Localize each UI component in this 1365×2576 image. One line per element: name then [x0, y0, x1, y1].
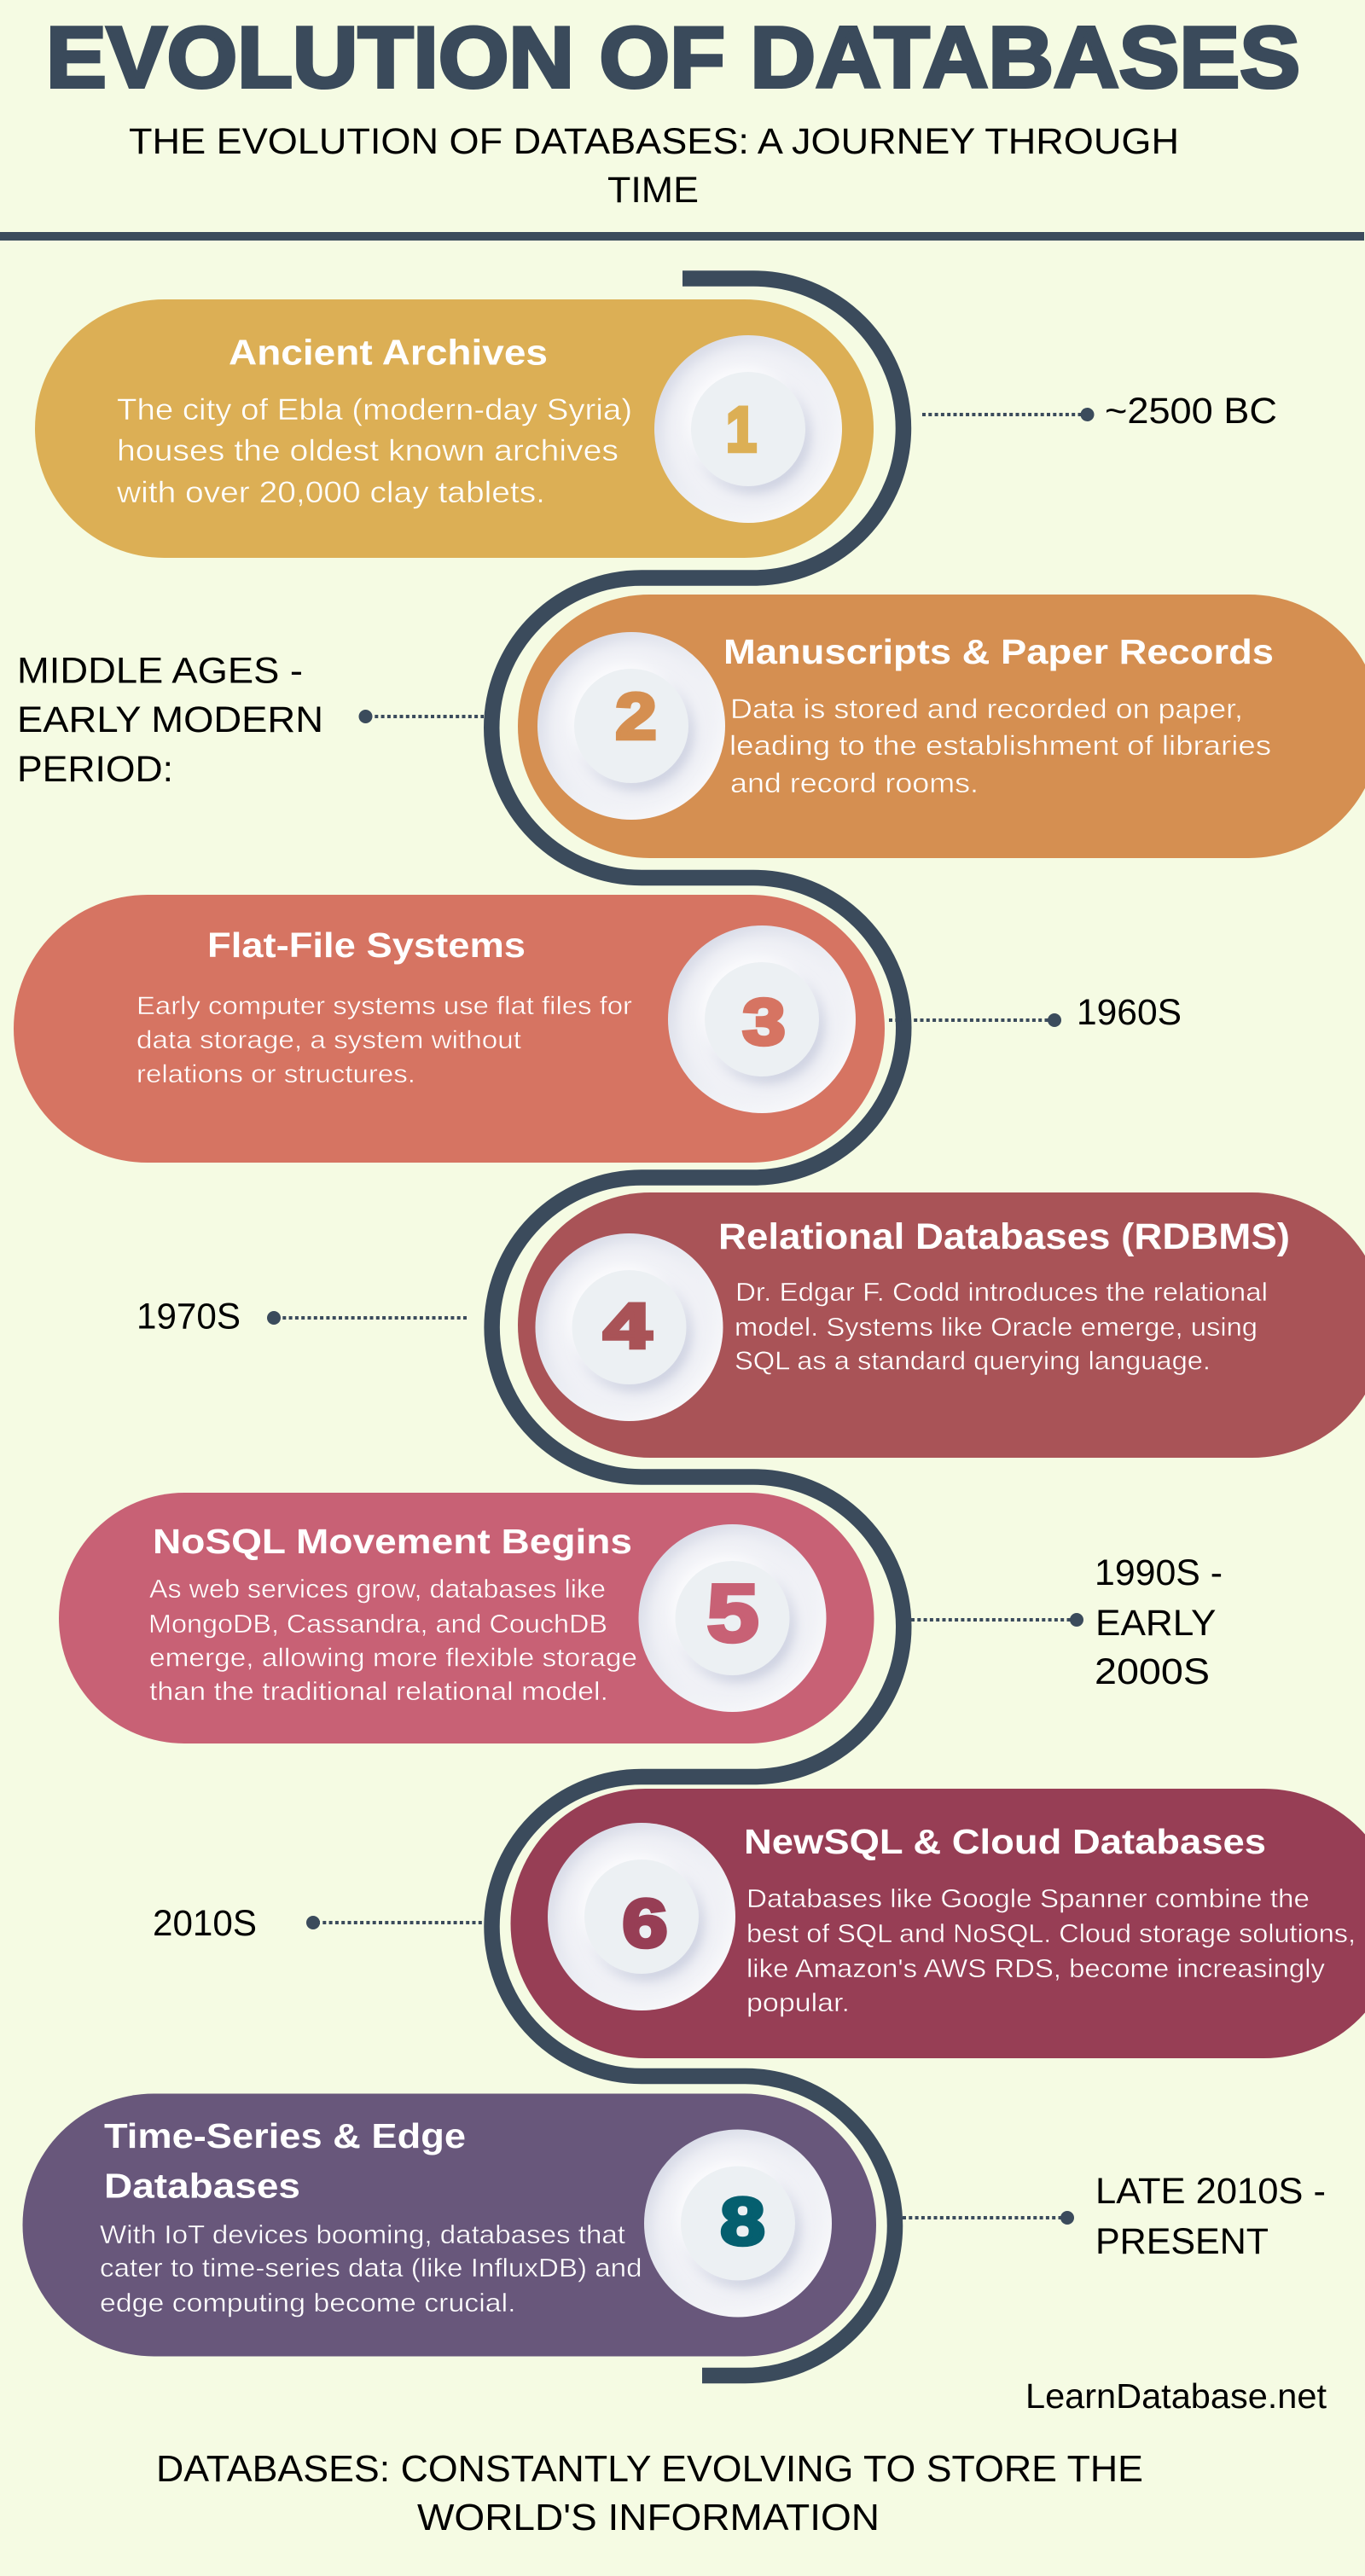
body text: houses the oldest known archives	[117, 434, 619, 467]
body text: MongoDB, Cassandra, and CouchDB	[148, 1609, 607, 1639]
panel: 3 Flat-File Systems	[14, 895, 885, 1163]
date label 2: PERIOD:	[17, 749, 173, 790]
panel: 2 Manuscripts	[518, 595, 1365, 858]
number badge	[537, 632, 725, 820]
date label 5	[1095, 1552, 1223, 1692]
number 8: 8	[720, 2184, 764, 2259]
body text: SQL as a standard querying language.	[735, 1346, 1211, 1375]
number 5: 5	[706, 1568, 759, 1659]
card background	[14, 895, 885, 1163]
website credit: LearnDatabase.net	[1025, 2376, 1327, 2416]
date connector 1	[922, 408, 1094, 421]
body text: edge computing become crucial.	[100, 2288, 515, 2318]
heading	[104, 2116, 466, 2206]
card background	[59, 1493, 874, 1743]
heading: Databases	[104, 2167, 300, 2206]
body text	[136, 992, 632, 1088]
footer tagline: DATABASES: CONSTANTLY EVOLVING TO STORE THE	[156, 2448, 1143, 2490]
body text: with over 20,000 clay tablets.	[116, 476, 545, 509]
body text	[100, 2219, 642, 2318]
date connector 3	[889, 1013, 1061, 1027]
subtitle	[129, 121, 1179, 211]
number badge	[644, 2129, 832, 2317]
header rule	[0, 232, 1364, 241]
title: EVOLUTION OF DATABASES	[46, 10, 1300, 106]
date label 5: 2000S	[1095, 1651, 1210, 1692]
panel: 1 Ancient Archives	[35, 299, 874, 558]
number 1: 1	[726, 394, 757, 465]
footer tagline	[156, 2448, 1143, 2538]
panel: 5 NoSQL Movement	[59, 1493, 874, 1743]
heading: NewSQL & Cloud Databases	[744, 1822, 1266, 1861]
date label 2: EARLY MODERN	[17, 699, 323, 740]
date label 3: 1960S	[1077, 992, 1182, 1033]
heading: Relational Databases (RDBMS)	[718, 1216, 1290, 1257]
panel: 6 NewSQL and Cloud	[510, 1789, 1365, 2058]
number badge	[668, 925, 856, 1113]
footer tagline: WORLD'S INFORMATION	[417, 2497, 880, 2538]
date connector 5	[911, 1613, 1083, 1627]
body text	[735, 1277, 1268, 1375]
date label 1: ~2500 BC	[1105, 391, 1277, 432]
body text: and record rooms.	[730, 768, 979, 798]
date connector 7	[903, 2211, 1074, 2225]
body text: relations or structures.	[136, 1060, 415, 1088]
body text: best of SQL and NoSQL. Cloud storage solutions,	[746, 1918, 1356, 1948]
heading: Time-Series & Edge	[104, 2116, 466, 2155]
card background	[35, 299, 874, 558]
date connector 2	[358, 710, 484, 723]
body text: As web services grow, databases like	[149, 1574, 606, 1604]
body text: Databases like Google Spanner combine the	[746, 1883, 1310, 1913]
subtitle: THE EVOLUTION OF DATABASES: A JOURNEY THROUGH	[129, 121, 1179, 162]
body text	[729, 693, 1271, 798]
date label 7: PRESENT	[1095, 2221, 1269, 2262]
number 3: 3	[742, 986, 785, 1059]
number 6: 6	[623, 1885, 667, 1961]
body text: popular.	[746, 1987, 850, 2017]
date label 4: 1970S	[136, 1297, 241, 1337]
number badge	[654, 335, 842, 523]
date label 2: MIDDLE AGES -	[17, 650, 303, 691]
body text	[746, 1883, 1356, 2017]
number badge	[638, 1524, 826, 1712]
number 2: 2	[616, 681, 657, 753]
date connector 6	[306, 1916, 483, 1929]
card background	[22, 2093, 876, 2356]
body text: The city of Ebla (modern-day Syria)	[117, 393, 632, 426]
date label 5: 1990S -	[1095, 1552, 1223, 1593]
date label 6: 2010S	[153, 1903, 257, 1944]
serpentine timeline line	[491, 278, 903, 2376]
body text: Dr. Edgar F. Codd introduces the relational	[735, 1277, 1268, 1307]
body text: data storage, a system without	[136, 1026, 522, 1054]
heading: Flat-File Systems	[207, 925, 526, 965]
card background	[518, 595, 1365, 858]
date label 7	[1095, 2171, 1326, 2262]
heading: Manuscripts & Paper Records	[723, 632, 1274, 671]
panel: 7 Time-Series and Edge	[22, 2093, 876, 2356]
number badge	[548, 1823, 735, 2010]
body text: cater to time-series data (like InfluxDB) and	[100, 2253, 642, 2283]
date label 7: LATE 2010S -	[1095, 2171, 1326, 2212]
heading: NoSQL Movement Begins	[153, 1522, 632, 1561]
number badge	[536, 1233, 723, 1421]
body text	[116, 393, 632, 509]
body text: leading to the establishment of libraries	[729, 730, 1271, 761]
date label 2	[17, 650, 323, 790]
body text: like Amazon's AWS RDS, become increasingly	[746, 1953, 1326, 1983]
card background	[518, 1192, 1365, 1458]
body text: than the traditional relational model.	[149, 1676, 608, 1706]
body text: Data is stored and recorded on paper,	[730, 693, 1243, 724]
body text: model. Systems like Oracle emerge, using	[735, 1312, 1258, 1342]
body text: With IoT devices booming, databases that	[100, 2219, 625, 2249]
body text: Early computer systems use flat files for	[136, 992, 632, 1020]
date label 5: EARLY	[1095, 1603, 1217, 1644]
panel: 4 Relational Databases	[518, 1192, 1365, 1458]
card background	[510, 1789, 1365, 2058]
number 4: 4	[604, 1291, 652, 1361]
date connector 4	[267, 1311, 467, 1325]
body text	[148, 1574, 637, 1706]
body text: emerge, allowing more flexible storage	[149, 1643, 637, 1672]
subtitle: TIME	[607, 170, 699, 211]
heading: Ancient Archives	[229, 333, 548, 372]
